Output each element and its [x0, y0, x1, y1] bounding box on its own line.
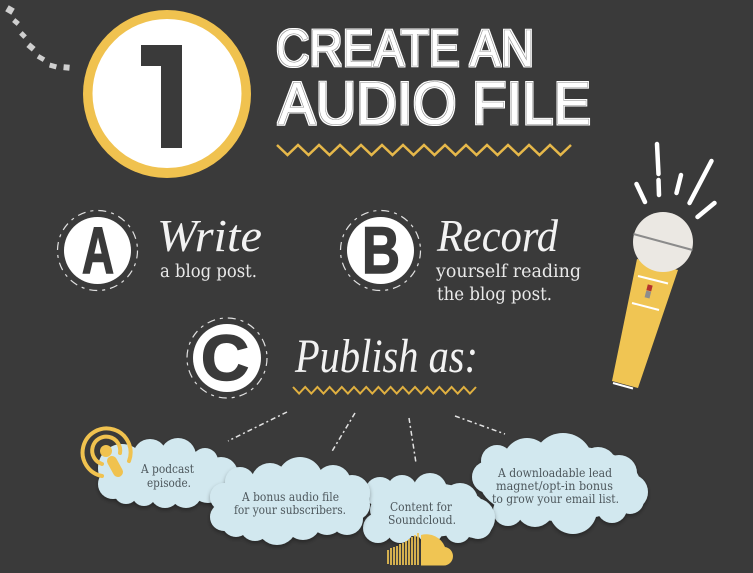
heading: Write: a blog post. — [160, 262, 257, 282]
title zigzag underline — [277, 145, 571, 155]
text: podcast: episode. — [147, 476, 191, 490]
heading: Write — [157, 210, 262, 282]
text: podcast: A podcast — [140, 462, 194, 476]
microphone — [612, 144, 714, 388]
heading: Record: yourself reading — [435, 262, 581, 282]
cloud: podcast — [98, 438, 238, 508]
cloud: soundcloud — [363, 473, 495, 543]
heading: Record: Record — [436, 210, 559, 261]
text: lead magnet: magnet/opt-in bonus — [496, 479, 613, 493]
publish zigzag underline — [293, 387, 476, 394]
number 1: 1 — [119, 12, 203, 180]
text: soundcloud: Content for — [390, 500, 452, 514]
handle — [612, 259, 678, 388]
sound rays — [636, 144, 714, 217]
text: lead magnet: to grow your email list. — [492, 492, 619, 506]
icon: soundcloud — [388, 533, 453, 566]
text: bonus audio — [234, 490, 346, 517]
cloud: bonus audio — [210, 457, 370, 545]
text: lead magnet — [492, 466, 619, 506]
heading: Publish as: Publish as: — [294, 330, 478, 383]
step A — [58, 210, 138, 290]
heading: Record: the blog post. — [437, 285, 552, 305]
cloud: lead magnet — [472, 433, 648, 534]
title: AUDIO FILE — [278, 70, 591, 137]
title — [276, 20, 591, 137]
step B — [340, 210, 420, 290]
text: soundcloud: Soundcloud. — [388, 513, 456, 527]
step A: A — [82, 213, 114, 287]
heading: Write: Write — [157, 210, 262, 261]
text: lead magnet: A downloadable lead — [497, 466, 612, 480]
title: CREATE AN — [276, 20, 534, 78]
icon: podcast — [83, 428, 131, 476]
text: bonus audio: for your subscribers. — [234, 503, 346, 517]
dashed connectors — [228, 412, 505, 463]
number badge — [83, 10, 251, 180]
heading: Record — [435, 210, 581, 305]
head — [633, 212, 693, 272]
step C — [187, 318, 267, 398]
step C: C — [201, 322, 249, 394]
step B: B — [362, 213, 400, 287]
text: bonus audio: A bonus audio file — [241, 490, 339, 504]
text: podcast — [140, 462, 194, 490]
decorative dotted trail — [5, 5, 70, 71]
text: soundcloud — [388, 500, 456, 527]
